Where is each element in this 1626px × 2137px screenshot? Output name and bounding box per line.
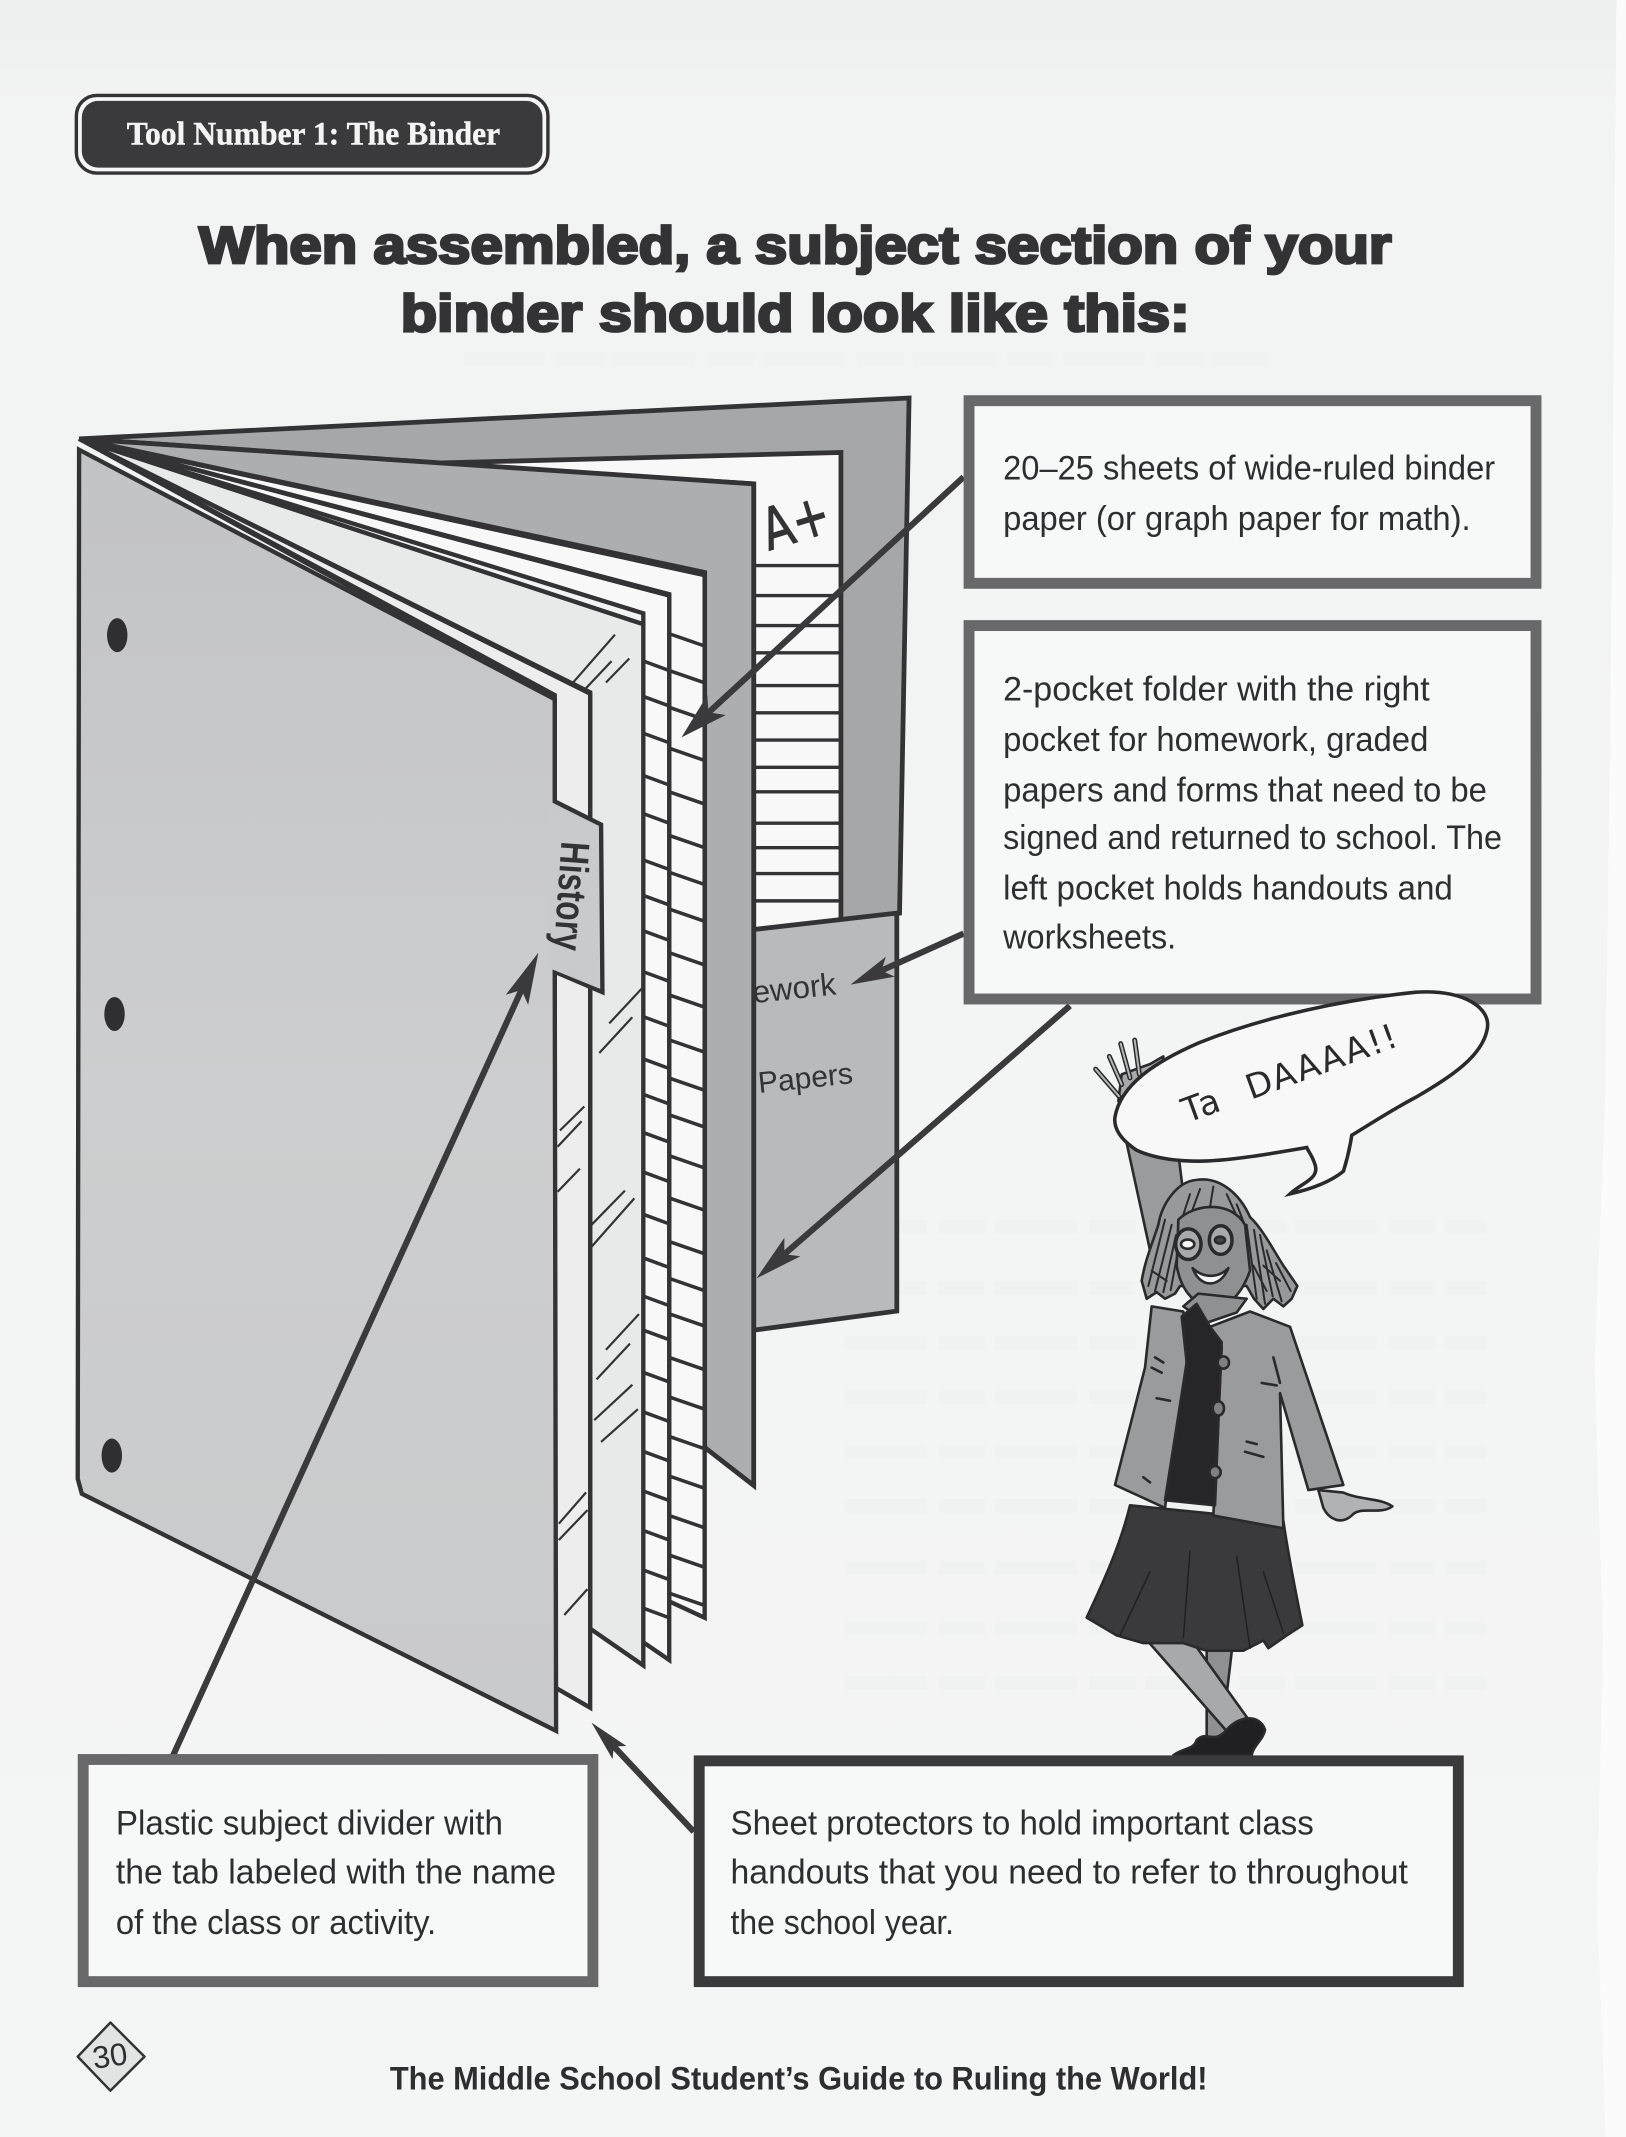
callout: binder paper: paper (or graph paper for math). [1003,500,1471,538]
callout: plastic divider [83,1759,593,1982]
sheet protector [79,439,643,1665]
header tab: Tool Number 1 [76,95,548,173]
binder holes [102,618,127,1473]
binder illustration [78,398,909,1731]
cartoon girl [1087,1040,1392,1755]
callout: sheet protectors: the school year. [731,1904,954,1942]
title [199,216,1392,342]
callout: 2-pocket folder: left pocket holds handouts and [1003,870,1453,908]
arrow: to folder [756,1006,1070,1278]
callout: 2-pocket folder: 2-pocket folder with the right [1003,671,1430,709]
hair [1142,1179,1297,1309]
apex fan lines [79,439,754,699]
face [1176,1207,1250,1323]
callout: 2-pocket folder: signed and returned to school. The [1003,819,1502,857]
jacket buttons [1209,1356,1229,1478]
callout: plastic divider: the tab labeled with the name [116,1854,556,1892]
binder sheet, front [79,439,669,1660]
callout: sheet protectors: handouts that you need to refer to throughout [731,1854,1408,1892]
speech bubble [1115,992,1488,1194]
callout: 2-pocket folder: papers and forms that need to be [1003,771,1487,809]
plastic divider strip [79,439,590,1708]
back cover of folder [79,398,909,929]
callout: plastic divider: of the class or activity. [116,1904,436,1942]
callout: binder paper [969,401,1536,583]
callout: 2-pocket folder [969,626,1536,999]
jacket [1115,1306,1343,1528]
arrow: to sheet protector [592,1723,694,1832]
footer: The Middle School Student’s Guide to Ruling the World! [390,2059,1208,2096]
right pocket of folder [751,913,897,1330]
skirt [1087,1505,1302,1651]
page number badge [78,2023,145,2091]
title: binder should look like this: [401,284,1190,342]
tab label: History: History [545,840,598,952]
legs and shoes [1145,1638,1265,1755]
dark top [1165,1304,1222,1505]
lower hand [1318,1490,1392,1520]
page number badge: 30 [90,2036,130,2076]
left flap of folder [79,439,754,1486]
callout: plastic divider: Plastic subject divider with [116,1804,503,1842]
arrow: to divider tab [173,953,538,1755]
arrow: to right pocket [850,934,964,985]
A+ graded paper: A+ [754,481,838,564]
arrow: to binder paper [681,477,964,737]
callout: binder paper: 20–25 sheets of wide-ruled binder [1003,450,1495,488]
callout: 2-pocket folder: worksheets. [1002,919,1176,957]
raised arm and hand [1096,1040,1183,1250]
callout: sheet protectors: Sheet protectors to hold important class [731,1804,1314,1842]
bubble text: Ta DAAAA!! [1176,1017,1403,1132]
binder sheet, back [79,439,705,1618]
callout: 2-pocket folder: pocket for homework, graded [1003,721,1428,759]
right pocket of folder: ework [751,966,838,1010]
title: When assembled, a subject section of your [199,216,1392,274]
front subject divider with tab [78,450,602,1731]
right pocket of folder: Papers [756,1057,854,1100]
A+ graded paper [424,452,841,935]
callout: sheet protectors [699,1761,1458,1982]
header tab: Tool Number 1: Tool Number 1: The Binder [127,116,500,152]
